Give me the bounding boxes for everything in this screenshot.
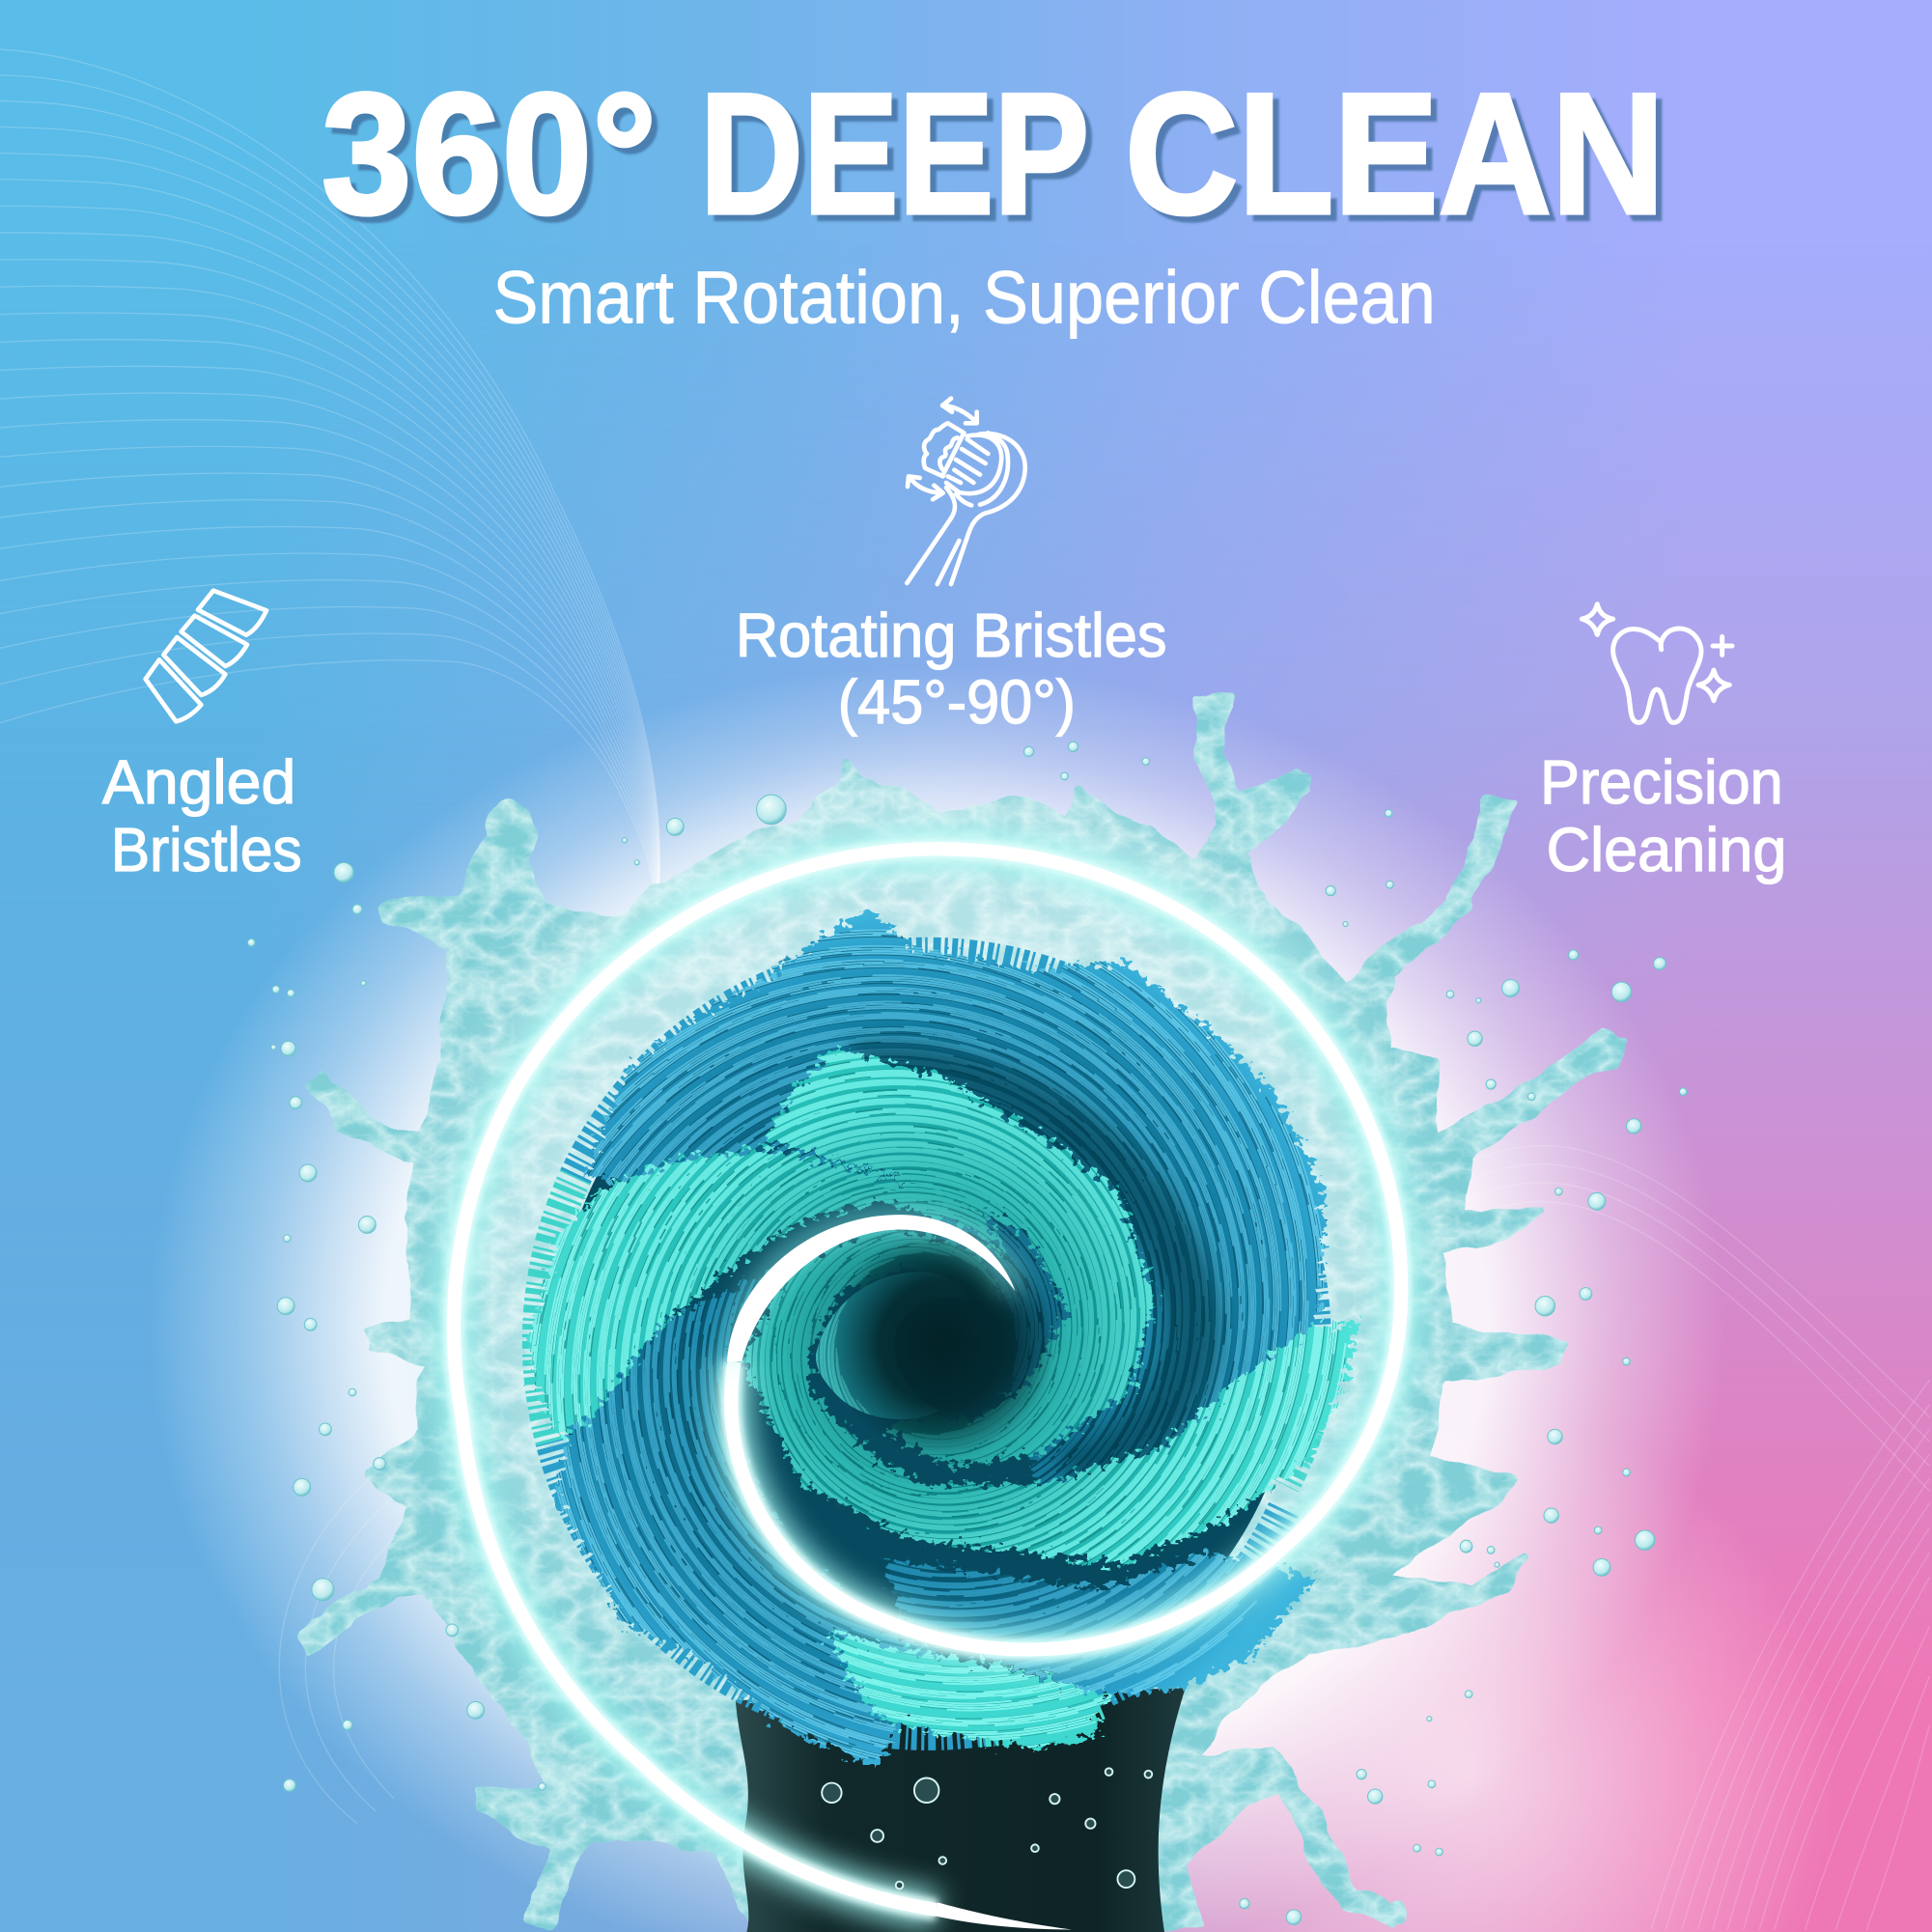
label: rotating bristles: (45°-90°): [838, 667, 1076, 737]
bristle arm: lower left blue: [165, 579, 1688, 1932]
label: rotating bristles: Rotating Bristles: [736, 601, 1167, 670]
bristle arm: bottom teal: [178, 591, 1675, 1932]
label: precision cleaning: Precision: [1540, 747, 1783, 817]
icon: sparkling tooth: [1582, 604, 1732, 722]
decorative wave lines, top left: [0, 45, 659, 921]
brush head neck: [736, 1688, 1186, 1932]
rotating bristle swirl: [521, 910, 1365, 1768]
bristle arm: inner spiral: [191, 604, 1663, 1932]
water droplets: [248, 742, 1687, 1924]
label: angled bristles: Bristles: [111, 815, 302, 884]
droplets on brush neck: [822, 1768, 1152, 1889]
icon: rotating toothbrush: [907, 399, 1025, 584]
bristle arm: top blue: [583, 910, 1333, 1486]
bristle arm: big teal spiral: [165, 579, 1688, 1932]
glowing spiral ring: [454, 849, 1401, 1929]
decorative wave lines, bottom right: [279, 1146, 1929, 1929]
label: precision cleaning: [1540, 747, 1786, 884]
title: 360°: [322, 57, 657, 250]
frayed bristle tips around the rim: [539, 954, 1326, 1734]
dark swirl eye: [828, 1229, 1056, 1457]
subtitle: Smart Rotation, Superior Clean: [492, 257, 1436, 339]
bristle arm: left teal: [165, 579, 1688, 1932]
label: angled bristles: Angled: [102, 747, 295, 817]
water splash: [299, 697, 1623, 1924]
label: precision cleaning: Cleaning: [1547, 815, 1786, 884]
title: DEEP: [700, 57, 1089, 250]
label: rotating bristles: [736, 601, 1167, 737]
icon: angled bristles: [146, 591, 266, 721]
pale glow inside the ring: [462, 785, 1386, 1709]
title: [322, 57, 1665, 250]
swirl bristle arms: [521, 910, 1365, 1768]
dark swirl base: [557, 973, 1297, 1713]
title: CLEAN: [1125, 57, 1665, 250]
bristle arm: lower right blue: [165, 579, 1688, 1932]
label: angled bristles: [102, 747, 302, 884]
bristle arm: upper teal: [165, 579, 1688, 1932]
